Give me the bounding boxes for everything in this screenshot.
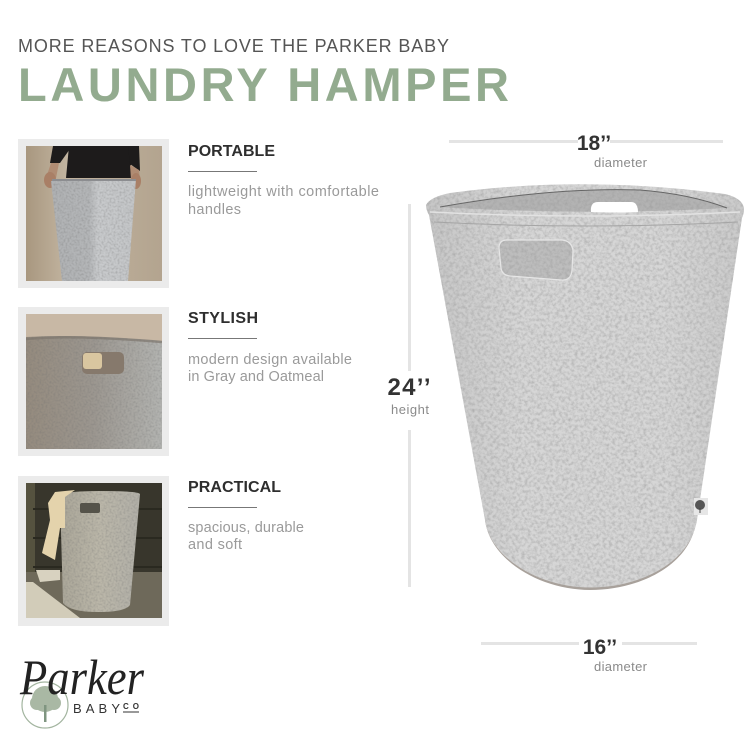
logo: Parker Baby Co (19, 649, 144, 728)
text: stylish description (188, 352, 352, 385)
heading: portable: PORTABLE (188, 143, 275, 160)
heading: title: LAUNDRY HAMPER (18, 58, 509, 111)
hamper body and rim (426, 184, 744, 588)
hamper base edge (485, 520, 696, 590)
dimension: width top 18 inches: 18’’ (577, 132, 611, 155)
text: practical description (188, 520, 304, 553)
photo: woman holding hamper (18, 139, 169, 288)
text: stylish description: modern design available (188, 352, 352, 368)
dimension: height 24 inches (388, 204, 430, 587)
hamper inner back wall (440, 190, 727, 212)
panel: practical (18, 476, 304, 626)
text: portable description: lightweight with comfortable (188, 184, 379, 200)
back handle opening (591, 202, 638, 212)
heading: stylish: STYLISH (188, 310, 258, 327)
text: practical description: and soft (188, 537, 242, 553)
brand tag (694, 498, 708, 515)
logo: script wordmark: Parker (19, 649, 144, 705)
front handle (499, 240, 573, 280)
panel: stylish (18, 307, 352, 456)
text: stylish description: in Gray and Oatmeal (188, 369, 324, 385)
logo: Parker Baby Co: CO (123, 702, 139, 711)
panel: portable (18, 139, 379, 288)
heading: practical: PRACTICAL (188, 479, 281, 496)
text: portable description (188, 184, 379, 218)
photo: hamper handle closeup (18, 307, 169, 456)
rim details (430, 190, 740, 226)
dimension: width bottom 16 inches: 16’’ (583, 636, 617, 659)
text: portable description: handles (188, 202, 241, 218)
text: practical description: spacious, durable (188, 520, 304, 536)
illustration: felt hamper (426, 184, 744, 590)
dimension: width bottom 16 inches: diameter (594, 659, 648, 674)
dimension: width top 18 inches: diameter (594, 155, 648, 170)
dimension: width bottom 16 inches (481, 636, 697, 674)
logo: tree emblem (22, 682, 68, 728)
logo: baby co: BABY (73, 701, 120, 716)
dimension: height 24 inches: 24’’ (388, 374, 430, 401)
heading: subtitle: MORE REASONS TO LOVE THE PARKER BABY (18, 36, 449, 56)
dimension: height 24 inches: height (391, 402, 429, 417)
photo: hamper with towel by dresser (18, 476, 169, 626)
dimension: width top 18 inches (449, 132, 723, 170)
